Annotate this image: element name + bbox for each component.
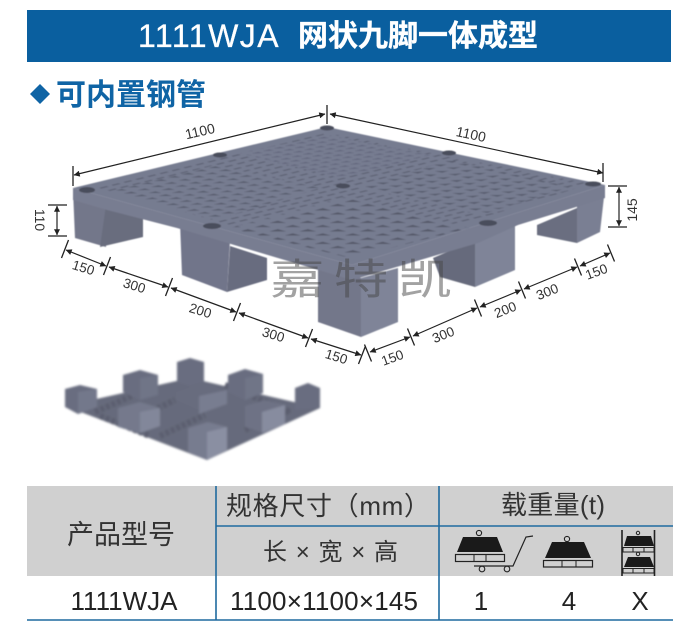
icon: rack load <box>622 530 654 576</box>
perforation field: front <box>230 197 470 258</box>
spec table <box>27 486 673 620</box>
dimension chain: front-right: 150 <box>583 261 610 283</box>
row: load values <box>474 586 649 616</box>
dimension: back-left 1100: 1100 <box>183 120 217 142</box>
dimension chain: front-right: 200 <box>492 299 519 321</box>
row: load values: 1 <box>474 586 488 616</box>
title text: 1111WJA <box>138 18 280 54</box>
dimension: back-left 1100 <box>73 105 327 186</box>
header: length width height: 长 × 宽 × 高 <box>263 539 398 566</box>
title banner <box>27 10 671 62</box>
table rules <box>27 486 673 620</box>
row: load values: 4 <box>562 586 576 616</box>
deck locating dots <box>79 126 601 229</box>
heading text: 可内置钢管 <box>56 79 206 112</box>
dimension: total height 145: 145 <box>624 198 640 222</box>
perforation field: right <box>360 160 570 215</box>
dimension chain: front-right: 300 <box>430 324 457 346</box>
dimension: total height 145 <box>608 186 640 227</box>
watermark: 嘉特凯 <box>270 257 461 303</box>
row: load values: X <box>631 586 649 616</box>
dimension: leg height 110 <box>32 205 67 236</box>
feet <box>65 358 320 460</box>
header: dimensions: 规格尺寸（mm） <box>226 491 430 521</box>
pallet top view photo <box>73 126 605 337</box>
dimension chain: front-right: 300 <box>534 281 561 303</box>
perforation field: left <box>110 165 320 220</box>
dimension chain: front-right <box>364 244 614 369</box>
underside deck <box>65 378 320 460</box>
dimension chain: front-left: 300 <box>260 324 286 345</box>
pallet underside photo <box>65 358 320 460</box>
row: model value: 1111WJA <box>71 586 178 616</box>
icon: dynamic load on cart <box>456 530 533 572</box>
underside deck grid <box>95 385 290 436</box>
deck side band <box>73 185 605 280</box>
deck top surface <box>73 127 605 265</box>
icon: static load <box>544 536 592 567</box>
dimension: leg height 110: 110 <box>32 209 48 231</box>
perforation dashes <box>95 133 590 258</box>
title text: 网状九脚一体成型 <box>298 20 538 53</box>
header: product model: 产品型号 <box>67 520 175 550</box>
perforation field: back <box>240 135 430 178</box>
row: size value: 1100×1100×145 <box>230 586 418 616</box>
dimension chain: front-left: 300 <box>121 275 147 296</box>
dimension: back-right 1100: 1100 <box>455 123 488 145</box>
dimension chain: front-left: 150 <box>70 257 96 278</box>
table header background <box>27 486 673 576</box>
header: load: 载重量(t) <box>501 490 605 520</box>
dimension chain: front-right: 150 <box>379 347 406 369</box>
dimension: back-right 1100 <box>330 114 603 182</box>
dimension chain: front-left: 200 <box>187 300 213 321</box>
dimension chain: front-left: 150 <box>323 346 349 367</box>
legs <box>73 188 605 337</box>
dimension chain: front-left <box>62 240 366 367</box>
icon: diamond bullet <box>30 84 50 104</box>
section heading <box>30 79 206 112</box>
